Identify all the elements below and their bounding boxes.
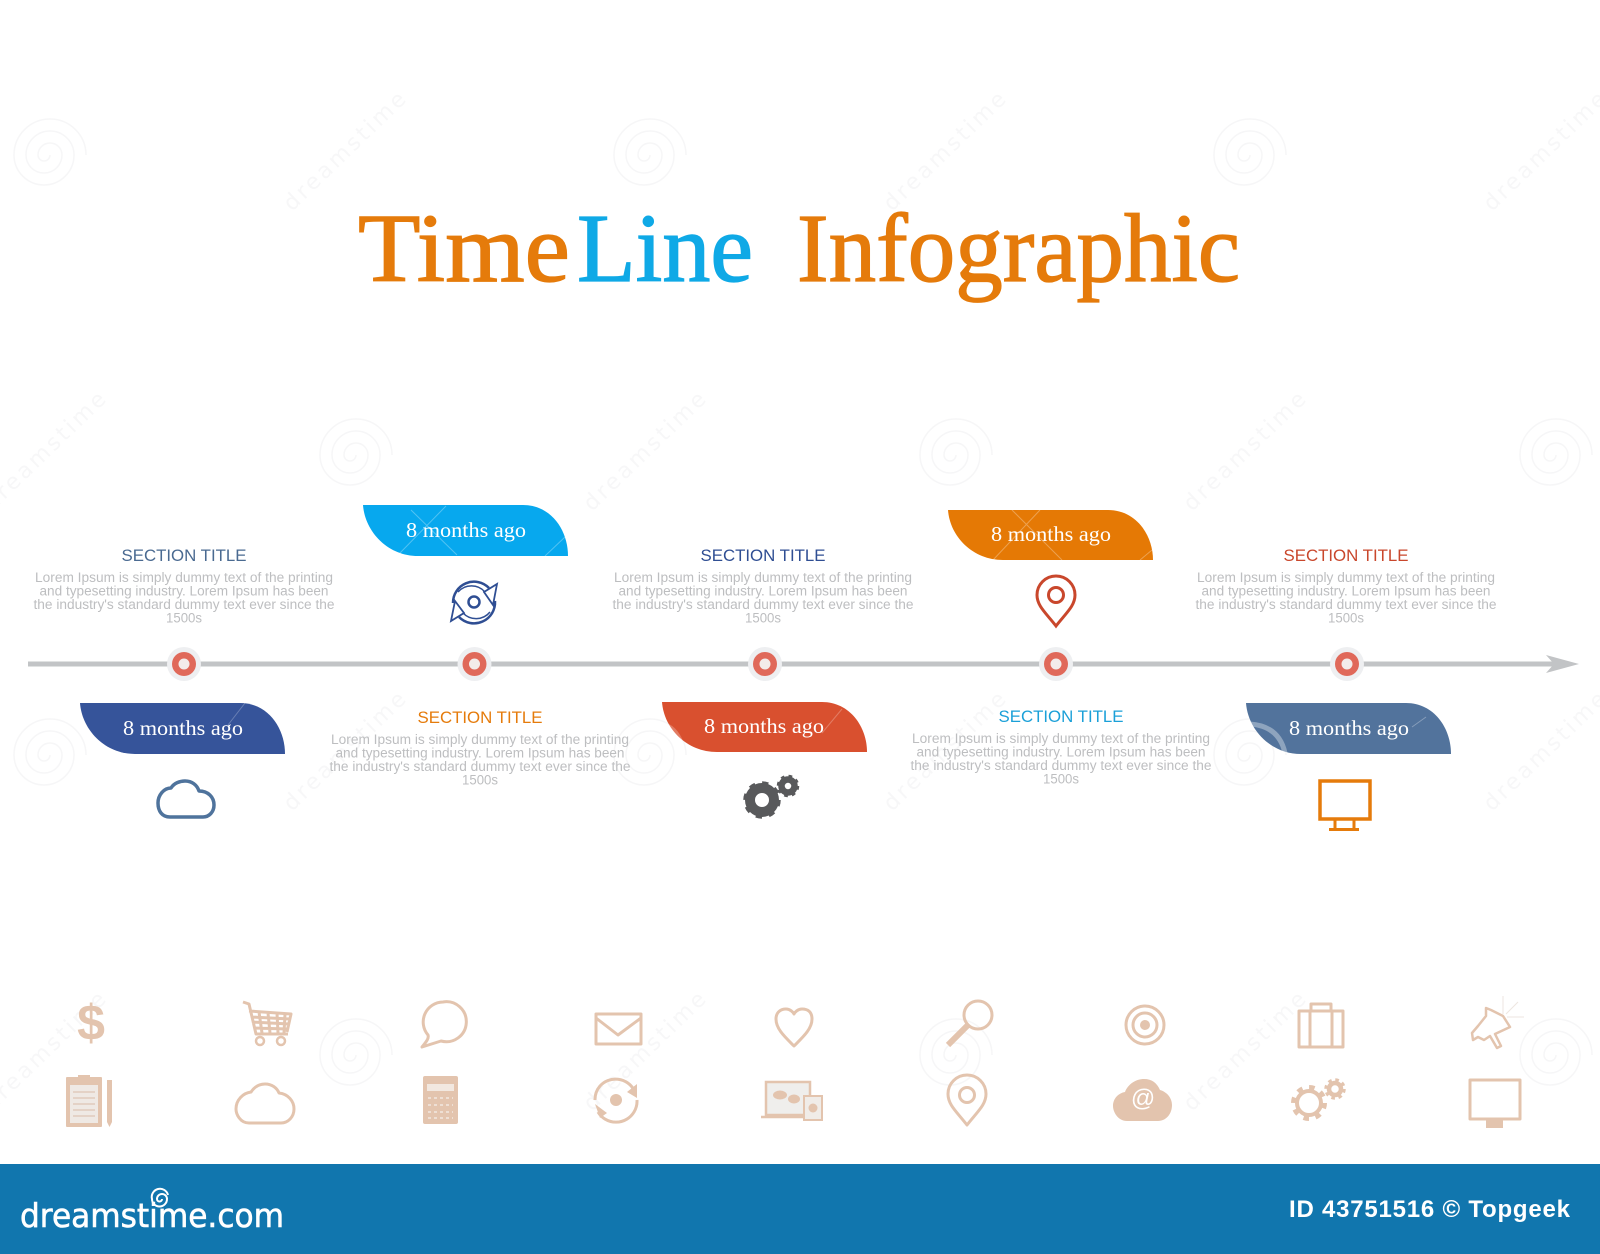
date tag: red — [662, 702, 867, 752]
logo: dreamstime.com: dreamstime.com — [20, 1196, 284, 1235]
icon: magnifier — [948, 1001, 992, 1045]
section 4 text: Lorem Ipsum is simply dummy text of the printing — [912, 731, 1210, 746]
watermark layer: dreamstime — [1179, 987, 1311, 1116]
icon: gears — [1294, 1080, 1344, 1118]
icon: cloud with at sign — [1113, 1079, 1172, 1121]
section 5 text: 1500s — [1328, 610, 1364, 626]
icon row: bottom muted icons — [66, 1075, 1520, 1128]
date tag: cyan: 8 months ago — [406, 518, 526, 542]
icon: location pin — [1037, 576, 1075, 626]
timeline node 5 — [1330, 647, 1364, 681]
date tag: red: 8 months ago — [704, 714, 824, 738]
section 4 text — [910, 708, 1212, 786]
section 3 text: and typesetting industry. Lorem Ipsum has been — [618, 584, 908, 598]
section 5 text: SECTION TITLE — [1284, 547, 1408, 565]
icon: dollar: $ — [77, 995, 105, 1051]
icon: monitor — [1470, 1080, 1520, 1128]
date tag: slate blue: 8 months ago — [1289, 716, 1409, 740]
section 1 text — [34, 547, 334, 626]
section 5 text: the industry's standard dummy text ever since the — [1196, 597, 1496, 612]
watermark layer: dreamstime — [279, 87, 411, 216]
icon: refresh disc — [451, 582, 497, 623]
watermark layer: dreamstime — [579, 987, 711, 1116]
icon: cloud — [236, 1084, 294, 1123]
icon: briefcase — [1299, 1004, 1343, 1047]
timeline node 3 — [748, 647, 782, 681]
icon: gears — [746, 776, 798, 816]
section 1 text: SECTION TITLE — [122, 547, 246, 565]
timeline node 1 — [167, 647, 201, 681]
icon: cloud with at sign: @ — [1131, 1085, 1155, 1112]
date tag: orange: 8 months ago — [991, 522, 1111, 546]
watermark layer: dreamstime — [879, 687, 1011, 816]
section 3 text: SECTION TITLE — [700, 547, 826, 565]
icon: shopping cart — [243, 1002, 291, 1045]
title: Infographic — [797, 195, 1240, 302]
watermark layer: dreamstime — [1179, 387, 1311, 516]
section 5 text — [1196, 547, 1496, 626]
image id and credit: ID 43751516 © Topgeek — [1289, 1196, 1571, 1223]
section 1 text: the industry's standard dummy text ever since the — [34, 597, 334, 612]
section 4 text: SECTION TITLE — [998, 708, 1124, 726]
section 3 text — [612, 547, 914, 626]
section 4 text: 1500s — [1043, 772, 1079, 786]
section 4 text: the industry's standard dummy text ever since the — [910, 758, 1212, 773]
icon: target — [1126, 1006, 1164, 1044]
timeline node 2 — [458, 647, 492, 681]
section 5 text: Lorem Ipsum is simply dummy text of the printing — [1197, 570, 1495, 585]
icon: calculator — [423, 1076, 458, 1124]
timeline node 4 — [1039, 647, 1073, 681]
title: Line — [577, 195, 753, 302]
section 1 text: 1500s — [166, 610, 202, 626]
section 2 text: 1500s — [462, 772, 498, 788]
icon: monitor — [1320, 781, 1370, 830]
watermark layer: dreamstime — [279, 687, 411, 816]
icon: heart — [776, 1009, 812, 1046]
section 2 text: the industry's standard dummy text ever since the — [330, 759, 630, 774]
title: Time — [358, 195, 570, 302]
icon: megaphone — [1472, 996, 1524, 1048]
icon: clipboard and pencil — [66, 1075, 112, 1127]
date tag: navy: 8 months ago — [123, 716, 243, 740]
section 2 text — [330, 709, 630, 788]
watermark layer: dreamstime — [879, 87, 1011, 216]
icon: laptop and tablet — [761, 1082, 822, 1120]
footer bar — [0, 1164, 1600, 1254]
section 3 text: Lorem Ipsum is simply dummy text of the printing — [614, 570, 912, 585]
icon: refresh disc — [595, 1079, 637, 1122]
section 2 text: SECTION TITLE — [418, 709, 542, 727]
date tag: orange — [948, 510, 1153, 560]
watermark layer: dreamstime — [579, 387, 711, 516]
section 3 text: the industry's standard dummy text ever since the — [612, 597, 914, 612]
icon: cloud — [158, 781, 214, 817]
section 1 text: and typesetting industry. Lorem Ipsum has been — [40, 584, 329, 598]
section 1 text: Lorem Ipsum is simply dummy text of the printing — [35, 570, 333, 585]
section 5 text: and typesetting industry. Lorem Ipsum has been — [1202, 584, 1490, 598]
icon: speech bubble — [422, 1002, 466, 1047]
section 2 text: and typesetting industry. Lorem Ipsum has been — [336, 746, 624, 760]
icon: location pin — [948, 1075, 986, 1125]
date tag: navy — [80, 703, 285, 754]
section 2 text: Lorem Ipsum is simply dummy text of the printing — [331, 732, 629, 747]
section 4 text: and typesetting industry. Lorem Ipsum has been — [916, 744, 1206, 760]
date tag: slate blue — [1246, 703, 1451, 754]
title — [358, 195, 1240, 302]
section 3 text: 1500s — [745, 610, 781, 626]
icon row: top muted icons — [77, 995, 1524, 1051]
icon: envelope — [596, 1014, 641, 1044]
timeline axis with arrow — [28, 655, 1579, 673]
date tag: cyan — [363, 505, 568, 556]
